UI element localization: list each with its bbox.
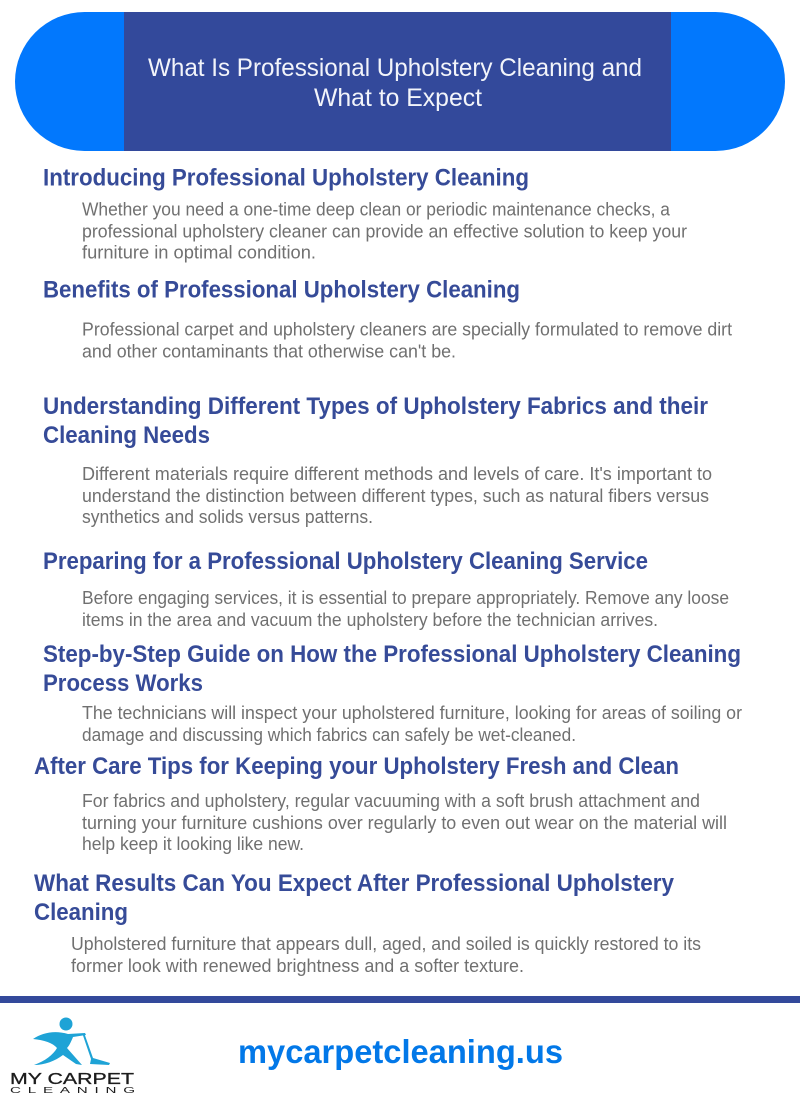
title banner — [15, 12, 785, 151]
text: fabrics body: synthetics and solids versus patterns. — [82, 507, 373, 527]
text: step-by-step body: damage and discussing which fabrics can safely be wet-cleaned. — [82, 725, 576, 745]
footer divider bar — [0, 996, 800, 1003]
text: benefits body: and other contaminants that otherwise can't be. — [82, 342, 456, 362]
section: results — [34, 870, 701, 976]
section: after care — [34, 753, 727, 854]
logo wordmark: MY CARPET — [10, 1071, 134, 1088]
text: preparing body: Before engaging services, it is essential to prepare appropriately. Remove any loose — [82, 588, 729, 608]
logo: my carpet cleaning — [10, 1018, 135, 1095]
heading: results: What Results Can You Expect After Professional Upholstery — [34, 870, 675, 897]
text: results body: former look with renewed brightness and a softer texture. — [71, 956, 524, 976]
heading: benefits: Benefits of Professional Upholstery Cleaning — [43, 276, 520, 304]
text: after care body: For fabrics and upholstery, regular vacuuming with a soft brush attachment and — [82, 791, 700, 811]
text: introducing body: Whether you need a one-time deep clean or periodic maintenance checks, a — [82, 200, 671, 220]
section: benefits — [43, 276, 732, 362]
text: fabrics body: understand the distinction between different types, such as natural fibers versus — [82, 486, 709, 506]
website url: mycarpetcleaning.us — [238, 1033, 563, 1070]
text: after care body — [82, 791, 727, 854]
heading: results — [34, 870, 675, 926]
text: introducing body: furniture in optimal condition. — [82, 242, 316, 262]
heading: fabrics: Understanding Different Types of Upholstery Fabrics and their — [43, 393, 708, 420]
logo wordmark — [10, 1071, 135, 1095]
heading: after care: After Care Tips for Keeping your Upholstery Fresh and Clean — [34, 753, 679, 780]
icon: cleaner figure with vacuum — [33, 1018, 110, 1065]
title text: What to Expect — [314, 84, 482, 112]
text: fabrics body — [82, 464, 712, 527]
text: benefits body: Professional carpet and upholstery cleaners are specially formulated to remove dirt — [82, 320, 732, 340]
title text: What Is Professional Upholstery Cleaning and — [148, 54, 642, 82]
section: step-by-step — [43, 641, 742, 745]
text: preparing body: items in the area and vacuum the upholstery before the technician arrives. — [82, 610, 658, 630]
text: step-by-step body — [82, 703, 742, 745]
title text — [148, 54, 642, 112]
text: preparing body — [82, 588, 729, 630]
heading: introducing: Introducing Professional Upholstery Cleaning — [43, 164, 529, 192]
section: introducing — [43, 164, 687, 262]
text: results body: Upholstered furniture that appears dull, aged, and soiled is quickly restored to its — [71, 934, 701, 954]
text: after care body: turning your furniture cushions over regularly to even out wear on the material will — [82, 813, 727, 833]
text: after care body: help keep it looking like new. — [82, 834, 304, 854]
heading: step-by-step: Process Works — [43, 670, 203, 697]
text: results body — [71, 934, 701, 976]
text: fabrics body: Different materials require different methods and levels of care. It's important to — [82, 464, 712, 484]
text: step-by-step body: The technicians will inspect your upholstered furniture, looking for areas of soiling or — [82, 703, 742, 723]
heading: step-by-step: Step-by-Step Guide on How the Professional Upholstery Cleaning — [43, 641, 741, 668]
section: fabrics — [43, 393, 712, 527]
text: introducing body: professional upholstery cleaner can provide an effective solution to keep your — [82, 222, 687, 242]
heading: fabrics: Cleaning Needs — [43, 422, 210, 449]
heading: results: Cleaning — [34, 899, 128, 926]
heading: step-by-step — [43, 641, 741, 697]
logo wordmark: CLEANING — [10, 1086, 135, 1095]
text: benefits body — [82, 320, 732, 362]
heading: preparing: Preparing for a Professional Upholstery Cleaning Service — [43, 548, 648, 575]
heading: fabrics — [43, 393, 708, 449]
section: preparing — [43, 548, 729, 630]
text: introducing body — [82, 200, 687, 262]
